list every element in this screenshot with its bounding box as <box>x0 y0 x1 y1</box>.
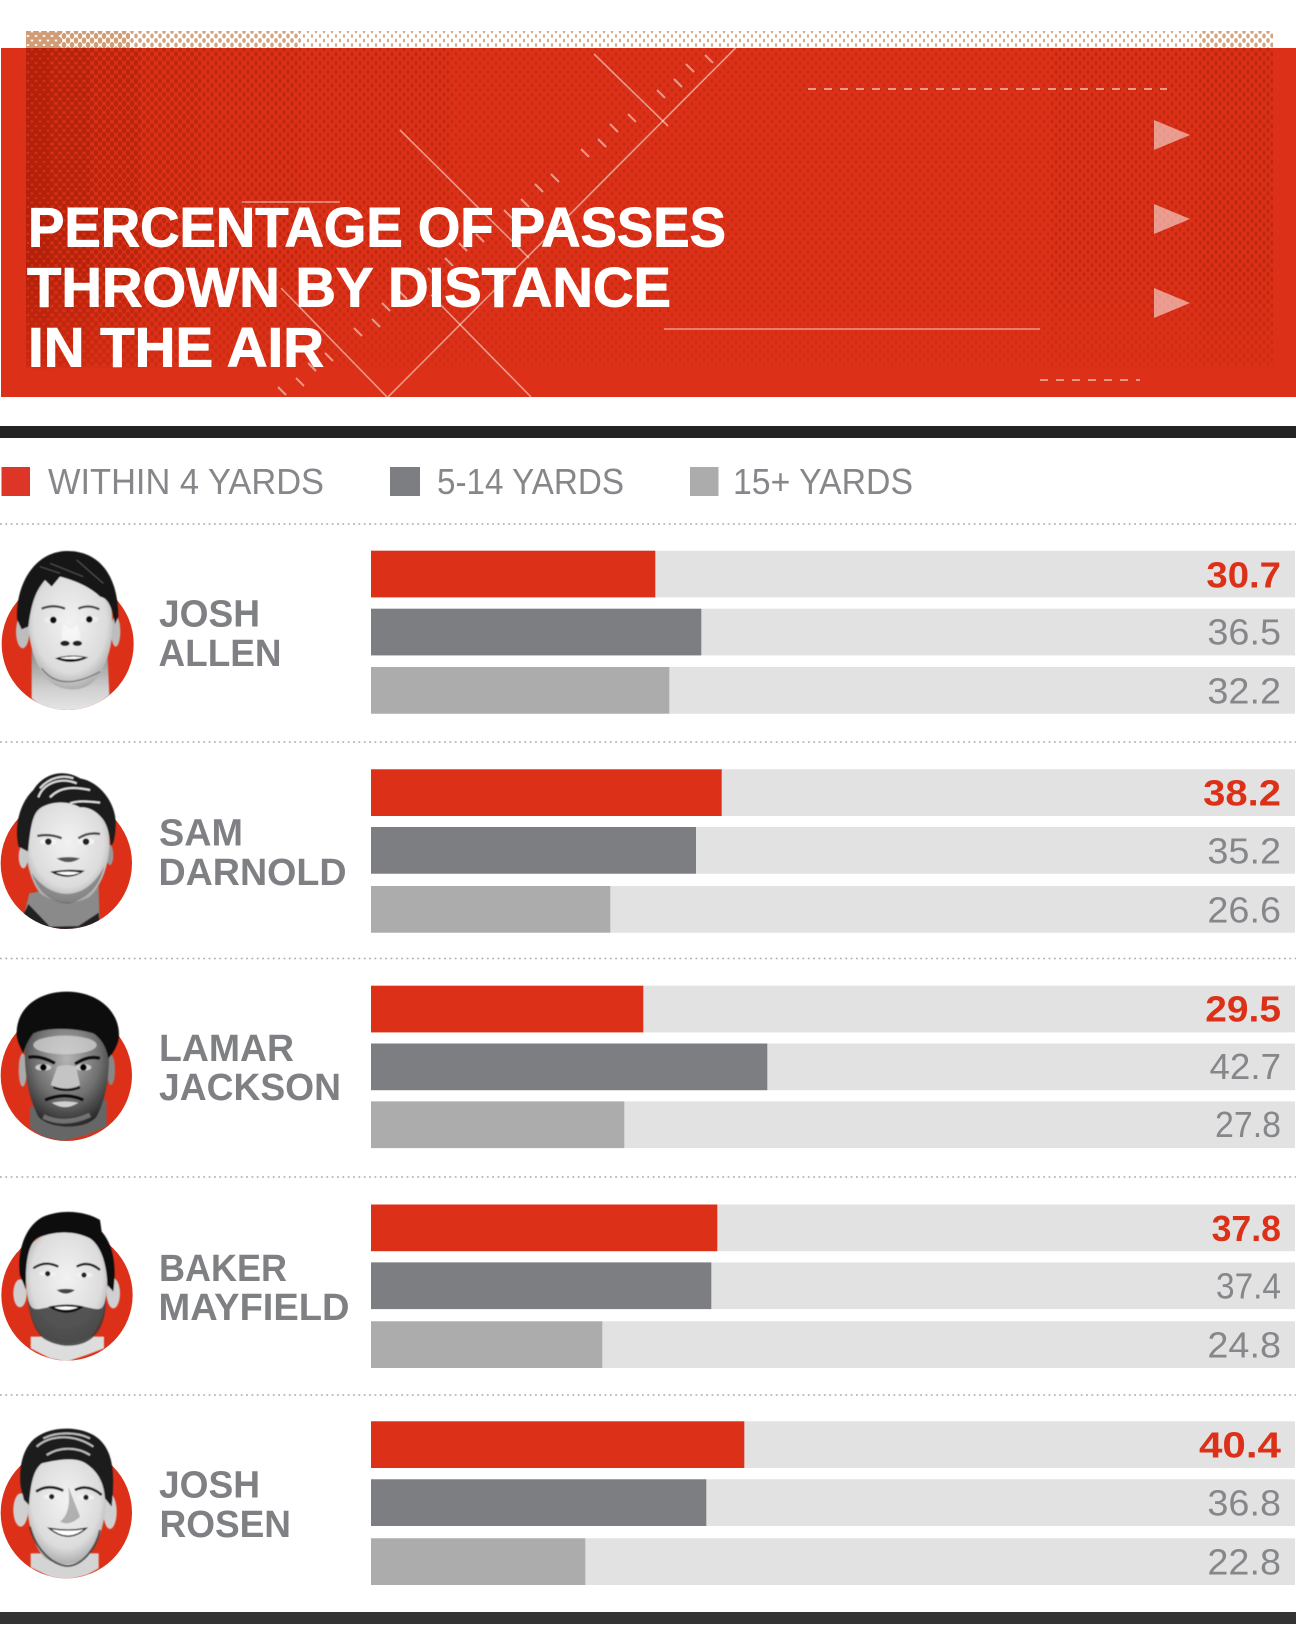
name: Lamar Jackson <box>159 1028 341 1109</box>
title: PERCENTAGE OF PASSES <box>28 196 726 259</box>
bar chart: Sam Darnold <box>371 769 1295 933</box>
header banner <box>1 31 1296 397</box>
bar chart: Baker Mayfield: 37.4 <box>1216 1266 1281 1306</box>
field lines <box>242 48 1167 397</box>
triangle markers <box>1154 120 1190 318</box>
name: Josh Allen <box>158 594 282 675</box>
name: Josh Rosen: JOSH <box>159 1465 260 1507</box>
panel: Josh Rosen <box>1 1421 1295 1585</box>
bar chart: Josh Rosen: 36.8 <box>1207 1482 1281 1524</box>
legend: 15+ yards: 15+ YARDS <box>733 461 913 502</box>
name: Josh Rosen <box>159 1465 291 1546</box>
bar chart: Lamar Jackson: 27.8 <box>1215 1104 1281 1145</box>
name: Josh Rosen: ROSEN <box>160 1504 291 1546</box>
name: Sam Darnold: DARNOLD <box>158 852 346 894</box>
portrait: Josh Allen <box>2 551 134 713</box>
halftone texture <box>26 48 1273 370</box>
halftone strip above banner <box>26 31 1273 48</box>
panel: Sam Darnold <box>1 769 1295 933</box>
bar chart: Lamar Jackson <box>371 986 1295 1148</box>
bar chart: Josh Allen: 30.7 <box>1206 554 1281 595</box>
legend <box>2 461 913 502</box>
bar chart: Josh Allen: 36.5 <box>1207 612 1281 653</box>
bar chart: Josh Rosen: 40.4 <box>1199 1424 1282 1466</box>
bar chart: Sam Darnold: 38.2 <box>1203 772 1281 814</box>
name: Sam Darnold: SAM <box>159 813 243 855</box>
name: Baker Mayfield <box>158 1248 350 1329</box>
legend: within 4 yards: WITHIN 4 YARDS <box>48 461 324 502</box>
name: Lamar Jackson: LAMAR <box>159 1028 294 1070</box>
bar chart: Josh Allen <box>371 551 1295 714</box>
name: Lamar Jackson: JACKSON <box>159 1067 341 1109</box>
bar chart: Sam Darnold: 26.6 <box>1207 890 1281 930</box>
title: THROWN BY DISTANCE <box>27 256 671 319</box>
bar chart: Baker Mayfield <box>371 1204 1295 1368</box>
portrait: Josh Rosen <box>1 1429 132 1580</box>
panel: Josh Allen <box>2 551 1295 714</box>
portrait: Sam Darnold <box>1 773 132 933</box>
name: Josh Allen: JOSH <box>159 594 260 636</box>
legend: 5-14 yards: 5-14 YARDS <box>437 461 624 502</box>
portrait: Lamar Jackson <box>1 992 132 1141</box>
bar chart: Josh Allen: 32.2 <box>1207 670 1281 711</box>
portrait: Baker Mayfield <box>1 1212 133 1362</box>
name: Sam Darnold <box>158 813 346 894</box>
bar chart: Josh Rosen: 22.8 <box>1207 1542 1281 1582</box>
bar chart: Baker Mayfield: 37.8 <box>1212 1208 1281 1249</box>
bar chart: Lamar Jackson: 42.7 <box>1210 1046 1281 1087</box>
red banner background <box>1 48 1296 397</box>
panel: Lamar Jackson <box>1 986 1295 1148</box>
name: Baker Mayfield: BAKER <box>159 1248 287 1290</box>
title <box>27 196 726 379</box>
name: Baker Mayfield: MAYFIELD <box>158 1287 350 1329</box>
name: Josh Allen: ALLEN <box>158 633 282 675</box>
title: IN THE AIR <box>28 316 324 379</box>
bar chart: Baker Mayfield: 24.8 <box>1207 1324 1281 1366</box>
bar chart: Josh Rosen <box>371 1421 1295 1585</box>
bar chart: Sam Darnold: 35.2 <box>1207 830 1281 872</box>
panel: Baker Mayfield <box>1 1204 1295 1368</box>
bar chart: Lamar Jackson: 29.5 <box>1205 988 1281 1029</box>
